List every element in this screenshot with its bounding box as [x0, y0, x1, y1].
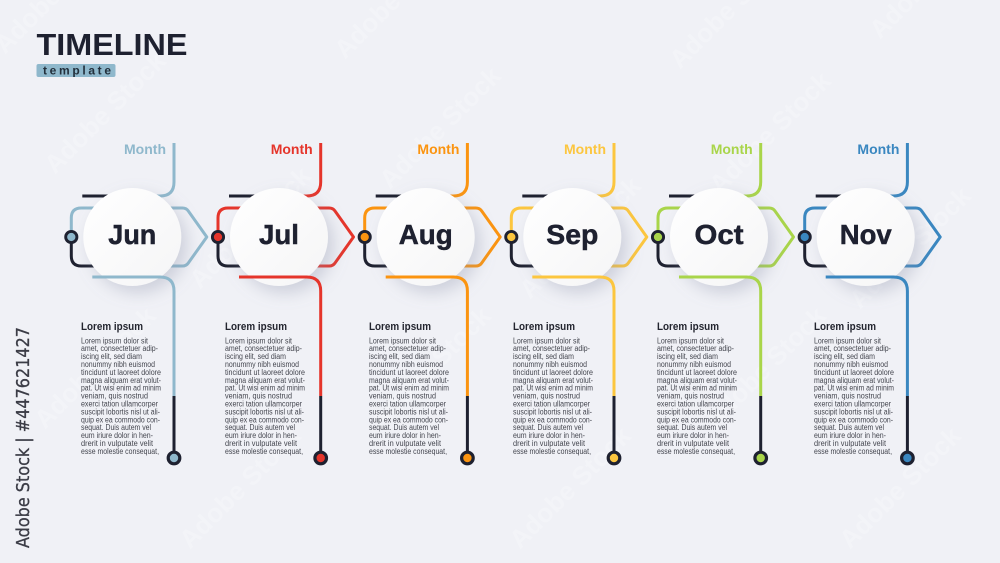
watermarks: Adobe Stock: [183, 160, 317, 294]
text block: Oct: esse molestie consequat,: [657, 447, 735, 456]
text block: Jul: amet, consectetuer adip-: [225, 344, 302, 353]
month name: Oct: [694, 219, 744, 250]
text block: Jun: tincidunt ut laoreet dolore: [81, 368, 161, 377]
month name: Sep: [546, 219, 598, 250]
text block: Aug: sequat. Duis autem vel: [369, 423, 439, 432]
text block: Oct: pat. Ut wisi enim ad minim: [657, 384, 737, 393]
top connector: [587, 143, 614, 196]
text block: Oct: veniam, quis nostrud: [657, 392, 724, 401]
text block: Jul: tincidunt ut laoreet dolore: [225, 368, 305, 377]
text block: Sep: sequat. Duis autem vel: [513, 423, 583, 432]
text block: Aug: tincidunt ut laoreet dolore: [369, 368, 449, 377]
text block: Aug: magna aliquam erat volut-: [369, 376, 449, 385]
bottom connector: [239, 277, 321, 396]
text block: Jun: veniam, quis nostrud: [81, 392, 148, 401]
text block: Aug: suscipit lobortis nisl ut ali-: [369, 407, 448, 416]
text block: Nov: exerci tation ullamcorper: [814, 400, 891, 408]
text block: Jun: sequat. Duis autem vel: [81, 423, 151, 432]
text block: Oct: eum iriure dolor in hen-: [657, 431, 729, 440]
left node: [652, 231, 664, 243]
text block: Nov: eum iriure dolor in hen-: [814, 431, 886, 440]
text block: Sep: nonummy nibh euismod: [513, 360, 587, 369]
top connector: [147, 143, 174, 196]
text block: Oct: exerci tation ullamcorper: [657, 400, 734, 408]
text block: Nov: nonummy nibh euismod: [814, 360, 888, 369]
text block: Sep: pat. Ut wisi enim ad minim: [513, 384, 593, 393]
text block: Jul: suscipit lobortis nisl ut ali-: [225, 407, 304, 416]
watermarks: Adobe Stock: [363, 300, 497, 434]
month label: Month: [417, 142, 459, 157]
text block: Oct: [657, 321, 737, 456]
watermarks: Adobe Stock: [843, 180, 977, 314]
top connector: [881, 143, 907, 196]
bracket and arrow: [218, 208, 249, 237]
text block: Jul: exerci tation ullamcorper: [225, 400, 302, 408]
text block: Nov: pat. Ut wisi enim ad minim: [814, 384, 894, 393]
text block: Aug: pat. Ut wisi enim ad minim: [369, 384, 449, 393]
text block: Sep: esse molestie consequat,: [513, 447, 591, 456]
text block: Sep: veniam, quis nostrud: [513, 392, 580, 401]
text block: Nov: esse molestie consequat,: [814, 447, 892, 456]
text block: Oct: sequat. Duis autem vel: [657, 423, 727, 432]
bottom connector: [679, 277, 761, 396]
text block: Sep: tincidunt ut laoreet dolore: [513, 368, 593, 377]
text block: Sep: drerit in vulputate velit: [513, 439, 586, 448]
text block: Aug: Lorem ipsum: [369, 321, 431, 333]
text block: Jun: drerit in vulputate velit: [81, 439, 154, 448]
text block: Aug: nonummy nibh euismod: [369, 360, 443, 369]
bracket and arrow: [71, 208, 102, 237]
text block: Aug: drerit in vulputate velit: [369, 439, 442, 448]
step: Oct: [652, 142, 794, 464]
text block: Oct: Lorem ipsum dolor sit: [657, 336, 725, 345]
text block: Jul: pat. Ut wisi enim ad minim: [225, 384, 305, 393]
watermarks: Adobe Stock: [173, 420, 307, 554]
text block: Sep: amet, consectetuer adip-: [513, 344, 590, 353]
text block: Jun: suscipit lobortis nisl ut ali-: [81, 407, 160, 416]
bottom node: [608, 452, 620, 464]
bracket and arrow: [511, 208, 542, 237]
bottom connector: [826, 277, 907, 396]
text block: Nov: iscing elit, sed diam: [814, 352, 875, 361]
month circle: [523, 188, 621, 286]
text block: Nov: Lorem ipsum: [814, 321, 876, 333]
watermarks: Adobe Stock: [833, 420, 967, 554]
watermarks: Adobe Stock: [373, 60, 507, 194]
text block: Sep: Lorem ipsum: [513, 321, 575, 333]
bottom connector: [386, 277, 467, 396]
left node: [359, 231, 370, 243]
bottom connector: [92, 277, 174, 396]
text block: Aug: iscing elit, sed diam: [369, 352, 430, 361]
month label: Month: [564, 142, 606, 157]
step: Jul: [212, 142, 354, 464]
text block: Aug: exerci tation ullamcorper: [369, 400, 446, 408]
text block: Aug: veniam, quis nostrud: [369, 392, 436, 401]
step: Sep: [506, 142, 647, 464]
subtitle badge: template: [43, 64, 111, 78]
step: Jun: [66, 142, 207, 464]
watermarks: Adobe Stock: [703, 65, 837, 199]
text block: Nov: magna aliquam erat volut-: [814, 376, 894, 385]
watermarks: Adobe Stock: [513, 170, 647, 304]
month name: Jul: [259, 219, 299, 250]
text block: Sep: magna aliquam erat volut-: [513, 376, 593, 385]
text block: Nov: suscipit lobortis nisl ut ali-: [814, 407, 893, 416]
text block: Jun: nonummy nibh euismod: [81, 360, 155, 369]
text block: Jun: exerci tation ullamcorper: [81, 400, 158, 408]
text block: Jun: eum iriure dolor in hen-: [81, 431, 153, 440]
text block: Jul: Lorem ipsum dolor sit: [225, 336, 293, 345]
top connector: [734, 143, 761, 196]
text block: Sep: eum iriure dolor in hen-: [513, 431, 585, 440]
text block: Jun: iscing elit, sed diam: [81, 352, 142, 361]
text block: Aug: [369, 321, 449, 456]
text block: Jun: [81, 321, 161, 456]
text block: Sep: exerci tation ullamcorper: [513, 400, 590, 408]
step: Aug: [359, 142, 500, 464]
bottom node: [902, 452, 913, 464]
text block: Jun: pat. Ut wisi enim ad minim: [81, 384, 161, 393]
month name: Aug: [399, 219, 453, 250]
text block: Oct: amet, consectetuer adip-: [657, 344, 734, 353]
left node: [799, 231, 810, 243]
left node: [212, 231, 224, 243]
month label: Month: [124, 142, 166, 157]
text block: Sep: [513, 321, 593, 456]
month circle: [230, 188, 328, 286]
text block: Aug: Lorem ipsum dolor sit: [369, 336, 437, 345]
text block: Oct: magna aliquam erat volut-: [657, 376, 737, 385]
text block: Jun: magna aliquam erat volut-: [81, 376, 161, 385]
month label: Month: [271, 142, 313, 157]
text block: Sep: suscipit lobortis nisl ut ali-: [513, 407, 592, 416]
text block: Sep: Lorem ipsum dolor sit: [513, 336, 581, 345]
watermarks: Adobe Stock: [38, 45, 172, 179]
text block: Nov: drerit in vulputate velit: [814, 439, 887, 448]
text block: Jun: Lorem ipsum dolor sit: [81, 336, 149, 345]
text block: Jul: drerit in vulputate velit: [225, 439, 298, 448]
step: Nov: [799, 142, 940, 464]
text block: Nov: amet, consectetuer adip-: [814, 344, 891, 353]
title: TIMELINE: [36, 27, 188, 62]
text block: Jul: sequat. Duis autem vel: [225, 423, 295, 432]
month circle: [377, 188, 475, 286]
text block: Nov: tincidunt ut laoreet dolore: [814, 368, 894, 377]
text block: Nov: Lorem ipsum dolor sit: [814, 336, 882, 345]
text block: Nov: [814, 321, 894, 456]
text block: Oct: quip ex ea commodo con-: [657, 415, 736, 424]
text block: Oct: nonummy nibh euismod: [657, 360, 731, 369]
text block: Jul: nonummy nibh euismod: [225, 360, 299, 369]
text block: Jul: quip ex ea commodo con-: [225, 415, 304, 424]
text block: Oct: suscipit lobortis nisl ut ali-: [657, 407, 736, 416]
text block: Jul: magna aliquam erat volut-: [225, 376, 305, 385]
bracket and arrow: [365, 208, 396, 237]
left node: [66, 231, 77, 243]
watermarks: Adobe Stock: [503, 420, 637, 554]
watermarks: Adobe Stock: [28, 300, 162, 434]
bottom connector: [532, 277, 614, 396]
month circle: [670, 188, 768, 286]
text block: Jul: eum iriure dolor in hen-: [225, 431, 297, 440]
text block: Aug: amet, consectetuer adip-: [369, 344, 446, 353]
top connector: [294, 143, 321, 196]
text block: Jun: Lorem ipsum: [81, 321, 143, 333]
top connector: [441, 143, 467, 196]
text block: Jul: [225, 321, 305, 456]
text block: Jul: iscing elit, sed diam: [225, 352, 286, 361]
text block: Jun: esse molestie consequat,: [81, 447, 159, 456]
text block: Nov: quip ex ea commodo con-: [814, 415, 893, 424]
text block: Oct: tincidunt ut laoreet dolore: [657, 368, 737, 377]
text block: Jun: amet, consectetuer adip-: [81, 344, 158, 353]
bracket and arrow: [805, 208, 836, 237]
text block: Jul: esse molestie consequat,: [225, 447, 303, 456]
month name: Jun: [108, 219, 156, 250]
month circle: [817, 188, 915, 286]
text block: Sep: quip ex ea commodo con-: [513, 415, 592, 424]
bottom node: [315, 452, 326, 464]
text block: Oct: Lorem ipsum: [657, 321, 719, 333]
month label: Month: [857, 142, 899, 157]
text block: Aug: eum iriure dolor in hen-: [369, 431, 441, 440]
bottom node: [168, 452, 180, 464]
text block: Jul: Lorem ipsum: [225, 321, 287, 333]
text block: Nov: veniam, quis nostrud: [814, 392, 881, 401]
text block: Nov: sequat. Duis autem vel: [814, 423, 884, 432]
text block: Oct: drerit in vulputate velit: [657, 439, 730, 448]
text block: Oct: iscing elit, sed diam: [657, 352, 718, 361]
watermarks: Adobe Stock: [698, 300, 832, 434]
month name: Nov: [840, 219, 892, 250]
stock id side label: Adobe Stock | #447621427: [13, 327, 34, 548]
month circle: [83, 188, 181, 286]
text block: Jul: veniam, quis nostrud: [225, 392, 292, 401]
month label: Month: [711, 142, 753, 157]
left node: [506, 231, 517, 243]
text block: Jun: quip ex ea commodo con-: [81, 415, 160, 424]
text block: Aug: esse molestie consequat,: [369, 447, 447, 456]
bracket and arrow: [658, 208, 689, 237]
text block: Aug: quip ex ea commodo con-: [369, 415, 448, 424]
text block: Sep: iscing elit, sed diam: [513, 352, 574, 361]
bottom node: [462, 452, 473, 464]
bottom node: [755, 452, 766, 464]
